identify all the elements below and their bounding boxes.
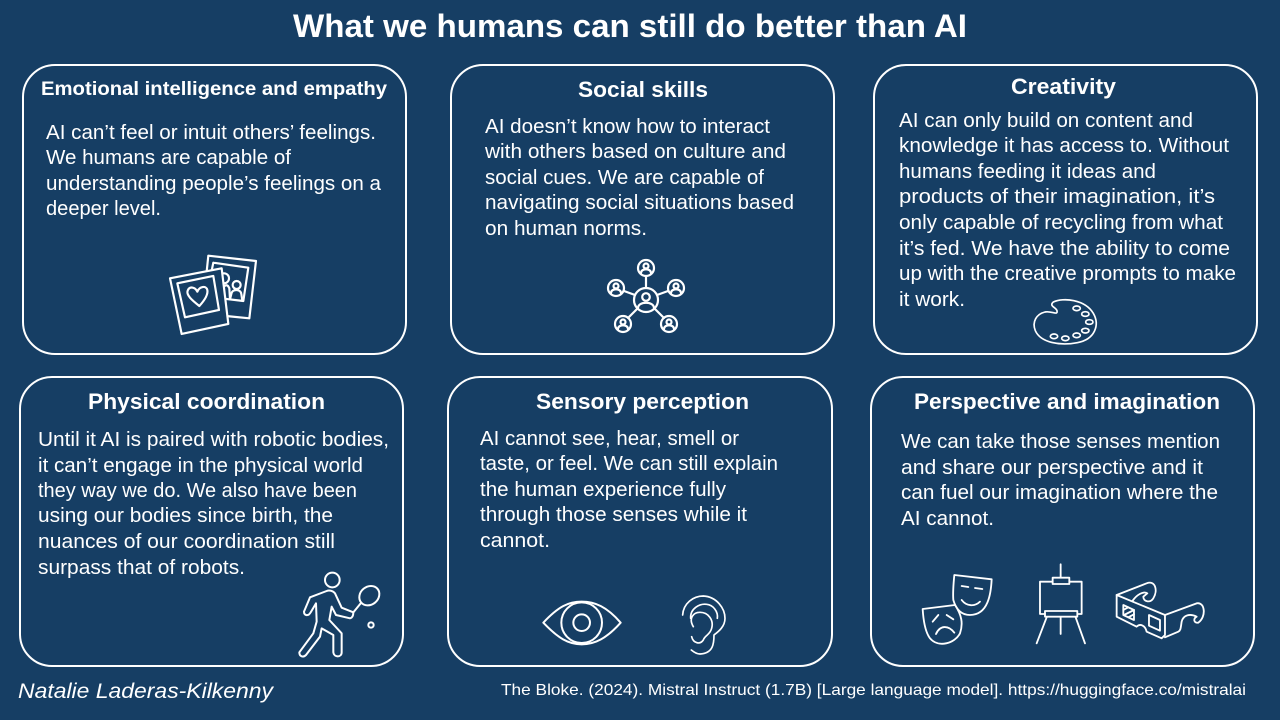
text block: physical coordination: Until it AI is paired with robotic bodies, [38, 429, 389, 451]
panel: emotional intelligence and empathy [23, 65, 406, 354]
text block: social skills: social cues. We are capable of [485, 167, 764, 189]
panel: perspective and imagination [871, 377, 1254, 666]
icon: paint palette [1034, 300, 1096, 344]
panel: sensory perception [448, 377, 832, 666]
text block: physical coordination: they way we do. We also have been [38, 480, 357, 502]
text block: social skills: navigating social situations based [485, 192, 794, 214]
heading: social skills: Social skills [578, 77, 708, 102]
panel: creativity [874, 65, 1257, 354]
text block: social skills: AI doesn’t know how to interact [485, 116, 770, 138]
text block: sensory perception: through those senses while it [480, 504, 747, 526]
text block: creativity: knowledge it has access to. Without [899, 135, 1229, 157]
text block: creativity [899, 110, 1236, 311]
panel: physical coordination [20, 377, 403, 666]
text block: social skills [484, 116, 794, 240]
text block: emotional intelligence: understanding people’s feelings on a [46, 173, 382, 195]
text block: creativity: humans feeding it ideas and [899, 161, 1156, 183]
icon: social network [608, 260, 684, 332]
title: What we humans can still do better than AI [293, 8, 967, 44]
text block: sensory perception: AI cannot see, hear, smell or [480, 428, 739, 450]
icon: eye [543, 602, 621, 644]
text block: creativity: only capable of recycling from what [899, 212, 1223, 234]
citation: The Bloke. (2024). Mistral Instruct (1.7B) [Large language model]. https://huggingface.co/mistralai [501, 682, 1246, 699]
text block: sensory perception: the human experience fully [480, 479, 726, 501]
text block: emotional intelligence: AI can’t feel or intuit others’ feelings. [46, 122, 376, 144]
text block: physical coordination: it can’t engage in the physical world [38, 455, 363, 477]
text block: sensory perception: taste, or feel. We can still explain [480, 453, 778, 475]
panel: social skills [451, 65, 834, 354]
heading: physical coordination: Physical coordination [88, 389, 325, 414]
heading: perspective and imagination: Perspective and imagination [914, 389, 1220, 414]
text block: emotional intelligence [46, 122, 382, 220]
text block: creativity: it work. [899, 289, 965, 311]
text block: physical coordination: surpass that of robots. [38, 557, 245, 579]
author credit: Natalie Laderas-Kilkenny [18, 680, 275, 703]
text block: creativity: AI can only build on content and [899, 110, 1193, 132]
text block: perspective and imagination [901, 431, 1220, 530]
text block: perspective and imagination: can fuel our imagination where the [901, 482, 1218, 504]
text block: perspective and imagination: and share our perspective and it [901, 457, 1203, 479]
icon: 3D glasses [1117, 583, 1204, 638]
text block: sensory perception: cannot. [480, 530, 550, 552]
text block: sensory perception [480, 428, 778, 552]
heading: emotional intelligence: Emotional intelligence and empathy [41, 79, 387, 100]
text block: physical coordination [38, 429, 389, 579]
text block: social skills: with others based on culture and [484, 141, 786, 163]
icon: ear [683, 596, 725, 654]
text block: emotional intelligence: We humans are capable of [46, 147, 291, 169]
text block: creativity: it’s fed. We have the ability to come [899, 238, 1230, 260]
icon: easel [1037, 564, 1085, 643]
icon: photos with heart [170, 256, 256, 334]
text block: social skills: on human norms. [485, 218, 647, 240]
text block: physical coordination: using our bodies since birth, the [38, 505, 333, 527]
text block: perspective and imagination: We can take those senses mention [901, 431, 1220, 453]
text block: creativity: up with the creative prompts to make [899, 263, 1236, 285]
text block: creativity: products of their imagination, it’s [899, 186, 1215, 208]
heading: sensory perception: Sensory perception [536, 389, 749, 414]
icon: tennis player [299, 573, 383, 656]
text block: perspective and imagination: AI cannot. [901, 508, 994, 530]
icon: theatre masks [923, 575, 992, 644]
heading: creativity: Creativity [1011, 74, 1117, 99]
text block: emotional intelligence: deeper level. [46, 198, 161, 220]
text block: physical coordination: nuances of our coordination still [38, 531, 335, 553]
